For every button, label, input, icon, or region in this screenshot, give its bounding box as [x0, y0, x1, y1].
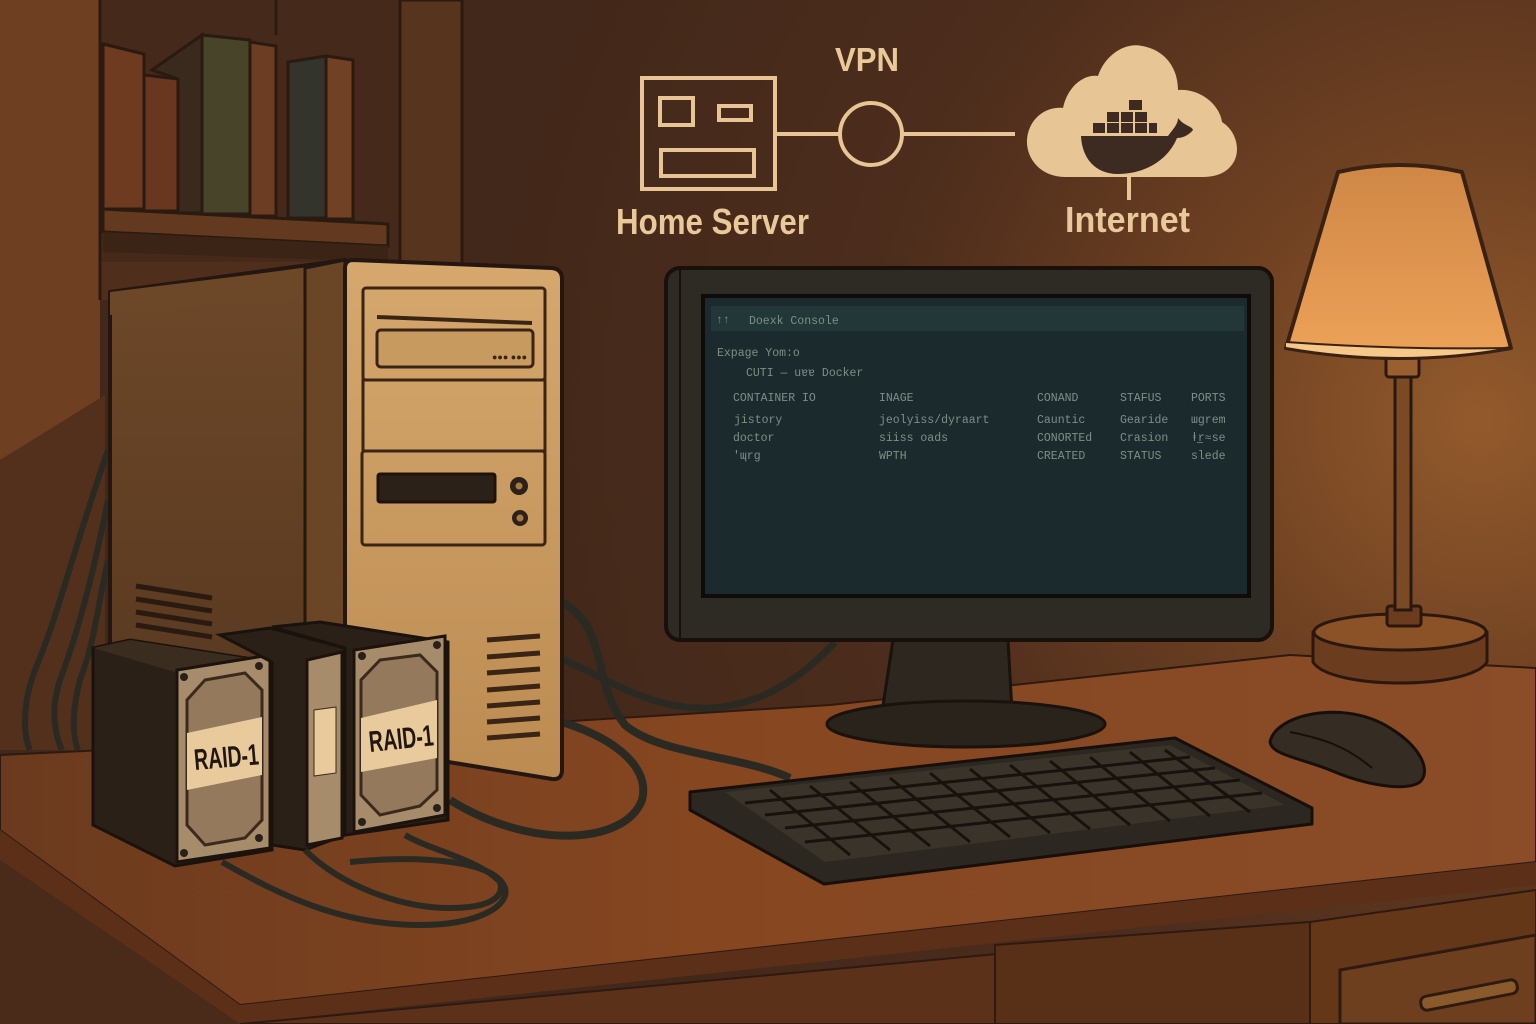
books — [103, 35, 353, 219]
console text: ɯgrem — [1191, 414, 1226, 427]
monitor stand — [882, 640, 1012, 712]
console text: PORTS — [1191, 392, 1226, 405]
computer tower — [110, 260, 562, 779]
screen — [703, 296, 1249, 596]
console text: WPTH — [879, 450, 907, 463]
console text: Expage Yom:o — [717, 347, 800, 360]
label: RAID-1 right: RAID-1 — [367, 719, 435, 759]
computer tower: ●●● ●●● — [492, 352, 527, 362]
lamp base — [1313, 616, 1487, 683]
lamp shade — [1286, 165, 1511, 358]
tower side — [110, 260, 345, 770]
label: RAID-1 left: RAID-1 — [193, 738, 260, 777]
top bay — [363, 288, 545, 380]
console text: Gearide — [1120, 414, 1168, 427]
console text: CONTAINER IO — [733, 392, 816, 405]
middle drive — [220, 628, 345, 850]
vents on side — [136, 586, 212, 637]
console text: siiss oads — [879, 432, 948, 445]
VPN link — [775, 103, 1015, 165]
lamp pole — [1395, 375, 1411, 610]
icon: home server — [642, 78, 775, 189]
right drive — [272, 622, 448, 835]
console text: CONORTEd — [1037, 432, 1092, 445]
lower bay — [362, 451, 545, 545]
icon: cloud with docker whale — [1027, 45, 1237, 200]
console text: CUTI — uɐɐ Docker — [746, 367, 863, 380]
console text: CREATED — [1037, 450, 1085, 463]
console text: Cauntic — [1037, 414, 1085, 427]
heading: VPN: VPN — [835, 41, 899, 78]
console text: CONAND — [1037, 392, 1079, 405]
console text: jistory — [734, 414, 782, 427]
monitor — [666, 268, 1272, 747]
RAID cables — [222, 835, 506, 925]
keyboard — [690, 738, 1312, 884]
desk — [0, 655, 1536, 1024]
left drive face — [177, 655, 270, 862]
monitor: ↑↑ — [716, 314, 730, 327]
bookshelf — [100, 0, 462, 300]
console text: slede — [1191, 450, 1226, 463]
lamp — [1286, 165, 1511, 683]
monitor: Doexk Console — [749, 315, 839, 328]
middle bay — [363, 380, 545, 451]
screws — [180, 641, 441, 857]
console text: INAGE — [879, 392, 914, 405]
label: Internet: Internet — [1065, 199, 1190, 240]
left drive — [93, 640, 272, 866]
bezel — [666, 268, 1272, 640]
label: Home Server: Home Server — [616, 201, 809, 242]
console text — [717, 347, 1226, 463]
console text: ⱡ͟r≈se — [1191, 432, 1226, 445]
title bar — [711, 306, 1244, 331]
cables behind tower — [25, 450, 835, 836]
console text: Crasion — [1120, 432, 1168, 445]
console text: jeolyiss/dyraart — [879, 414, 989, 427]
console text: STATUS — [1120, 450, 1162, 463]
console text: STAFUS — [1120, 392, 1162, 405]
RAID drives — [93, 622, 448, 866]
shelf board — [103, 209, 388, 246]
mouse — [1270, 712, 1425, 787]
network diagram — [616, 41, 1237, 242]
console text: doctor — [733, 432, 774, 445]
front vents — [487, 636, 540, 738]
console text: 'ɰrg — [733, 450, 761, 463]
tower front — [345, 260, 562, 779]
left wall panel — [0, 0, 105, 750]
